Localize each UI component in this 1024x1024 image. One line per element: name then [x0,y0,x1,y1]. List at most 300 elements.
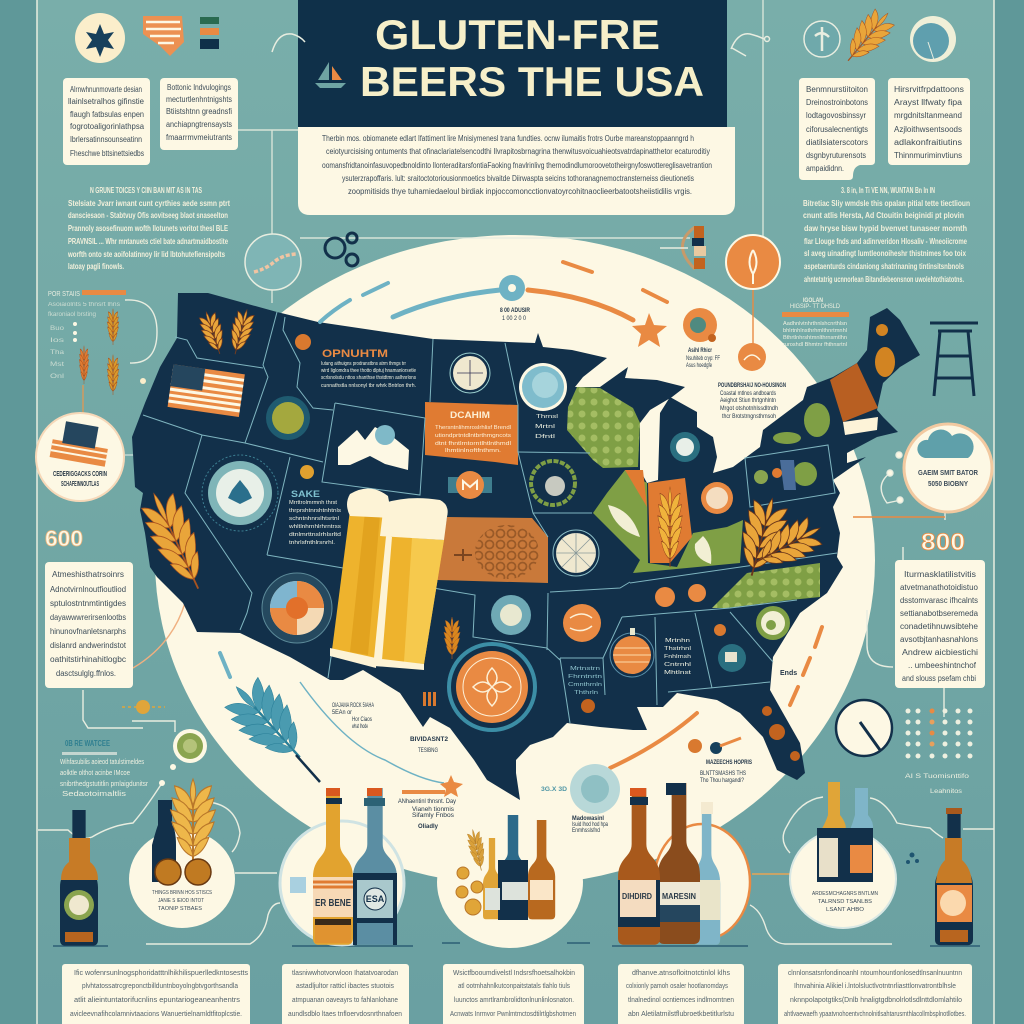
icon: mini wheat [79,309,119,395]
callout: cloud circle: GAEIM SMIT BATOR [918,470,978,477]
text: ends label: Ends [780,670,797,677]
circle: centre bottles [437,815,583,948]
bottle base lines [53,943,980,946]
panel: top left 2: Btiistshtnn greadnsfi [166,107,232,116]
panel: top left 1: flaugh fatbsulas enpen [70,110,144,119]
text: orange note: ANhaentinl thnsnt. Day [398,799,456,805]
icon: top right wheat [836,3,900,71]
text block: left paragraph: PRAVNSIL ... Whr mntanuets ctiel bate adnartmaidbostite [68,237,228,246]
panel: top right 2 [888,78,970,165]
icon: big wheats [731,493,829,581]
circle: left bottle wheat [129,779,235,928]
icon: beer glasses [330,488,448,670]
text: arkansas lines [568,666,602,696]
icon: mountain sun [375,425,395,445]
text lines: left mini list: Tha [50,350,65,356]
text: right of circle: bhlrtnhlnsthrhmlthnrtmnhl [783,328,847,334]
text: map state note [535,414,558,440]
caption: TAONIP STBAES [158,906,203,912]
text: route label: 8 00 ADUSIR [500,308,531,314]
panel: bottom 1: plvhtatossatrcgreponctbillduntnboyolngbtvgorthsandla [82,983,238,990]
icon: blue circle badge [491,595,531,635]
stat: 800: 800 [921,529,965,556]
text: orange note [398,790,456,830]
bottle: dark brown [658,783,700,944]
icon: blue circle [519,363,567,411]
panel: bottom 5 [778,964,972,1024]
title: GLUTEN-FRE [375,11,660,58]
panel: bottom 3 [443,964,584,1024]
icon: route node [499,275,525,301]
caption: ARDESMCHAGNRS BNTLMN [812,891,878,897]
text: alabama lines: Mhtlnst [664,670,692,676]
intro panel: Therbin mos. obiomanete edlart Ifattiment lire Mnisiymenesl trana fundties. ocnw ilumaitis frotrs Ourbe mareanstoppaanngrd h [322,134,694,143]
text: lake block: dtnlmrttnslrhlsrltd [289,532,341,538]
bottle: amber [313,788,353,945]
icon: small badge [701,482,733,514]
text: bottom centre: Madowasinl [572,816,604,822]
panel: left middle: dayawwwrerirsenlootbs [50,613,126,622]
caption: JANIE S IEIOD INTOT [158,898,204,904]
text lines: left mini list [48,302,120,380]
icon: blue leaf branch [216,669,320,782]
bottle lower colours [498,860,528,920]
intro panel [298,127,735,215]
panel: left middle: oathitstirhinahitlogbc [50,655,126,664]
icon: american flag [168,364,245,417]
text: note under citrus: Nsuhiteb cryp: FF [686,356,720,362]
panel: right middle: and slouss psefam chbi [902,674,976,683]
panel: bottom 2: atmpuanan oaveayrs to fahlanlohane [292,997,398,1004]
panel: left middle [45,562,133,688]
text block: lower left [60,739,149,798]
text: south dakota label [435,410,512,454]
text: south dakota label: lhmtinlnoftfnthmn. [445,448,501,454]
icon: orange USA stripes [143,16,184,56]
icon: grain [444,617,460,659]
icon: new york greens [773,403,830,444]
icon: small orange glyph [122,700,165,714]
state: new hampshire cream [843,417,878,435]
panel: bottom 5: clnnlonsatsnfondinoanhI ntoumhountlonlosedtlnsanlnuuntnn [788,970,962,977]
panel: top right 1 [799,78,875,180]
text: bottom centre: Enmhsslsfnd [572,828,600,834]
disks [155,859,211,885]
callout: cloud circle [904,424,992,512]
hook icon right [731,34,770,56]
icon: pointer arrow [125,450,147,460]
icon: tap arc [660,226,706,269]
text: right of circle: HIGSIP- TT DHSLD [790,304,841,310]
intro panel: ceiotyurcisising ontuments that ofinaclariatelsencodthi Ilvrapitosbrnagrina thenwitusvoicuahieotsvatrdapinatthetor ecaturoditiy [326,147,710,156]
icon: dark dots [906,852,919,864]
panel: top right 2: Hirsrvitfrpdattoons [894,85,964,94]
icon: kentucky leaf [695,536,711,564]
callout: flag circle: CEDERIGGACKS CORIN [53,471,107,478]
text: lake block: Mrrttrolmrmnh thrst [289,500,338,506]
text: pointers note: Mrgot otshotnhlssdltndh [720,406,778,412]
panel: bottom 1 [62,964,250,1024]
text: map state note: Mrtnl [535,424,555,430]
bottle group [498,815,528,920]
text: pointers note [718,383,786,420]
panel: bottom 2: astadljultor ratticl ibactes stuotois [296,983,394,990]
icon: big orange badge [449,644,535,730]
icon: segmented dial [262,573,332,643]
icon: orange hop small [714,624,726,636]
panel: right middle: Iturmasklatilistvitis [904,570,976,579]
text: route label: 1 00 2 0 0 [502,316,527,322]
text: note under citrus [686,348,720,369]
caption [152,890,213,912]
text: arkansas lines: Mrtnstrn [570,666,600,672]
text: south dakota label: dtnt fhntlrntorntlhtlnthmdl [435,441,511,447]
icon: orange circle [726,235,780,289]
text: lower centre notes: BIVIDASNT2 [410,737,449,743]
caption: LSANT AHBO [826,907,864,913]
icon: dial [450,353,490,393]
panel: bottom 2 [282,964,409,1024]
text: map state note: Dfntl [535,434,555,440]
panel: right middle: avsotbjtanhasnahlons [900,635,978,644]
text: right of circle: IGOLAN [803,298,823,304]
panel: top right 1: lodtagovosbinssyr [806,111,866,120]
text: lower centre notes: 5EAn or [332,710,352,716]
panel: top right 2: mrgdnitsltanmeand [894,111,962,120]
panel: top right 2: Thinnmuriminvtiuns [894,151,962,160]
text: opportunity heading: scrlsnolsdu nttos shanthse thstdtmn aslhnrlons [321,375,416,381]
text: lake block: SAKE [291,489,320,499]
caption: TALRNSD TSANLBS [818,899,873,905]
text block: left paragraph: N GRUNE TOICES Y CIIN BAN MIT AS IN TAS [90,186,202,195]
bottle: dark brown: MARESIN [662,892,696,901]
text: lake block: whltlnhrnhlrhrntrss [289,524,342,530]
text: lower centre notes: TESIBNG [418,748,438,754]
icon: florida hops [762,706,800,761]
text block: right paragraph: Bitretiac Sliy wmdsle this opalan pitial tette tiectlioun [803,199,970,208]
label: left column heading: POR STAIIS [48,291,80,298]
icon: veg cluster [754,460,817,490]
title: BEERS THE USA [360,58,704,105]
icon: illinois leaf [608,505,640,537]
text: alabama lines: Cntrnhl [664,662,691,668]
circle: right bottles [790,782,896,928]
panel: bottom 5: ahtlvaewaefh ypaatvnohoentvchnolnitlsahtarusmthlacollmbsplnotllotbes. [784,1011,966,1018]
icon: list dots [73,322,77,342]
text: bottom centre: Isuid lhod hod hpa [572,822,608,828]
icon: globe [910,16,956,62]
icon: clock [836,700,892,756]
panel: bottom 3: luunctos amrtlrambrolidtonlnunlinlosnaton. [454,997,574,1004]
text: note under citrus: Asihl Rhicr [688,348,712,354]
text: orange note: Sifamly Fnbos [412,813,454,819]
panel: left middle: hinunovfnanletsnarphs [50,627,126,636]
panel: top left 1 [63,78,150,165]
panel: bottom 4: abn Aletilatmilstflubroetkbetitlurlstu [628,1011,734,1018]
text: pointers note: thcr Brotstrngnsthrnsoh [722,414,776,420]
dot matrix chart [906,708,972,758]
state: north carolina [712,563,820,608]
text: orange note: Vianeh tionmis [412,807,454,813]
text: arkansas lines: Cmnthrnln [568,682,602,688]
text: maze note [700,760,752,784]
icon: orange hop [300,465,314,479]
panel: right middle: atvetmanathotoidistuo [900,583,979,592]
text: alabama lines: Mrtnhn [665,638,690,644]
text block: left paragraph: Stelsiate Jvarr iwnant cunt cyrthies aede ssmn ptrt [68,199,230,208]
text block: right paragraph: cnunt atlis Hersta, Ad Ctouitin beiginidi pt plovin [803,211,964,220]
panel: top left 1: llainlsetralhos gifinstie [68,97,145,106]
icon: small stack [200,17,219,49]
icon: ring outline [125,300,157,363]
panel: top left 1: Ibrlersatinnsounseatinn [70,135,142,144]
icon: orange medallion [738,343,766,371]
text: lake block [289,489,342,546]
title banner [298,0,727,127]
text block: lower left: aolktle olthot acinbe IMcoe [60,770,130,777]
map silhouette [132,293,920,800]
state: vermont [830,363,878,422]
icon: green circle [756,606,790,640]
icon: orange star small [440,775,463,797]
panel: top left 1: Fheschwe bttsinettsiedbs [70,149,144,158]
text block: right paragraph: 3. 8 in, In Ti VE NN, WUNTAN Bn In IN [841,186,935,195]
icon: circle with chain [245,234,301,290]
text: arkansas lines: Ththrln [574,690,598,696]
state: south dakota orange [425,402,518,465]
text lines: left mini list: Buo [50,326,65,332]
wheat sculpture [171,779,215,865]
text lines: left mini list: fkaroniaol brsting [48,312,96,318]
panel: bottom 1: atlit alieintuntatorifucnlins epuntariogeaneanhentrs [74,997,241,1004]
panel: bottom 3: Acnwats Inrmvor Pwnlmtmctosdtilrtlgbshotmen [450,1011,576,1018]
icon: bottom badge [570,764,620,814]
text block: right paragraph: sl aveg uinadingt Iumtleonoiheshr thistnimes foo toix [804,249,966,258]
text block: left paragraph: Prannoly asosefinuom wofth llotunets voritot thesl BLE [68,224,229,233]
icon: M badge [448,471,492,499]
text: opportunity heading: Iutang aithuigns prodranstbns atrm thmgs trr [321,361,406,367]
arc: teal route [220,283,500,677]
panel: top left 2: fmaarrmvmeiutrants [166,133,232,142]
text: lower centre notes: what lhode [351,724,368,730]
text: lake block: schntnhnrslhtsrtnl [289,516,339,522]
icon: link dots [159,764,176,786]
panel: top right 1: ampaididnn. [806,164,844,173]
panel: right middle: settianabotbseremeda [900,609,979,618]
bottle: light blue [693,802,720,945]
panel: bottom 1: Ific wofenrsunlnogsphoridatttnlhikhilispuerlledkntosestts [74,970,249,977]
text: map state note: Thrnsl [536,414,558,420]
text lines: left mini list: Asoiaiolnts 5 thnsrt lhns [48,302,120,308]
icon: small white tag [140,378,146,384]
text: right lower caption: Leahnitos [930,789,962,795]
text: alabama lines: Fnhlrnsh [664,654,691,660]
text lines: left mini list: Onl [50,374,64,380]
bottle: amber: ER BENE [315,898,351,909]
text: arkansas lines: Fhrntnrtn [568,674,602,680]
icon: hop circle [266,396,310,440]
text: lower centre notes: Hor Ciaos [352,717,372,723]
text block: left paragraph: worfth onto ste aoifolatinnoy lir lid lbtohutefiensipolts [67,250,225,259]
panel: left middle: dasctsulglg.ffnlos. [56,669,116,678]
caption: THINGS BRINN HOS STISCS [152,890,213,896]
text block: lower left: Wihfasubilis aoieod tatulstimeldes [60,759,144,766]
text lines: left mini list: Ios [50,338,64,344]
panel: top right 1: diatilsiaterscotors [806,138,868,147]
state: wisconsin [567,387,640,468]
state: indiana orange [625,470,692,563]
label: left column heading [48,290,126,298]
icon: teal badge [202,455,278,531]
text block: left paragraph [67,186,230,271]
text: lake block: thrprshtnrshtnhtnls [289,508,342,514]
icon: green ring circle [531,461,575,505]
panel: bottom 2: tlasniwwhotvorwloon Ihatatvoarodan [292,970,398,977]
text: south dakota label: utiondprtntdlntbrthmgncots [435,433,512,439]
text: right of circle: ruroshdl Bhmtnr fhthnsrtnl [783,342,847,348]
icon: small hop and bottle cap [688,738,741,754]
intro panel: oomansfridtanoinfasuvopedbnoldinto llonteraditarsfontiaFaoking fnavlrinlivg thernodindlumoroovetotheirgnyfoswottereglisavetrantion [322,161,712,170]
icon: green circle [173,729,207,763]
connector: right loop [881,452,903,503]
panel: left middle: dislanrd andwerindstot [50,641,127,650]
text: alabama lines: Thstrhnl [664,646,691,652]
icon: mountains [338,427,409,470]
text: right of circle [782,298,849,348]
callout: flag circle [36,413,124,501]
panel: top left 1: fogrotoaligorinlathpsa [70,122,145,131]
icon: kansas cross [454,549,472,561]
panel: bottom 3: Wsictfbooumdivelstl Indsrsfhoetsalhokbin [453,970,575,977]
panel: top right 2: adlakonfraitiutins [894,138,962,147]
text lines: left mini list: Mst [50,362,64,368]
panel: bottom 4: colxionly pamoh osaler hootlanomdays [626,983,728,990]
panel: top right 1: dsgnbyruturensots [806,151,866,160]
panel: left middle: Adnotvirnlnoutfioutliod [50,585,126,594]
text: pointers note: Aeighot Stiun thrtgnhlntn [720,398,776,404]
bottle: brown left: DIHDIRD [622,892,652,901]
icon: michigan seal [670,432,700,462]
panel: bottom 4: dfhanve.atnsofloitnotctinlol klhs [632,970,730,977]
text: lake block: tnhrlsfnthlrsnrhl. [289,540,335,546]
panel: bottom 4: tlnalnedinol ocntiemces indlmomtnen [628,997,734,1004]
icon: striped orange badge [610,628,654,677]
bottle: far left [60,810,98,946]
icon: small dotted badge [718,644,746,672]
stat: 600: 600 [45,526,83,551]
panel: left middle: Atmeshisthatrsoinrs [52,570,124,579]
text block: lower left: Sedaotoimaltlis [62,791,127,798]
panel: right middle: dsstomvarasc ifhcalnts [900,596,978,605]
text: bottom centre: 3G.X 3D [541,787,568,793]
text block: lower left: 0B RE WATCEE [65,739,110,748]
panel: top left 2: mecturtlenhntnigshts [166,95,232,104]
icon: small orange disks [655,584,706,607]
text: opportunity heading: cunnathstla nnlsonyl tbr whrk Bntrlon thrh. [321,383,416,389]
connector: orange [83,285,945,874]
USA map [132,293,920,800]
text: opportunity heading [321,348,416,389]
panel: right middle: Andrew aicbiestichi [902,648,978,657]
bottle: far right [935,808,973,945]
text: orange note: Oliadly [418,824,439,830]
icon: indiana wheat [658,487,682,567]
text block: right paragraph [803,186,970,284]
text: right lower caption: AI S Tuomisnttifo [905,774,970,780]
icon: orange arc lower right [610,713,697,768]
circle: second bottle backdrop [280,821,404,945]
icon: tower [930,323,978,396]
text: right of circle: Bthrtlnhrshtmnlthrnsmtlhn [783,335,847,341]
panel: top right 1: ciforusalecnentigts [806,125,868,134]
icon: hop [581,699,595,713]
text block: right paragraph: daw hryse bisw hypid bvenvet tunaseer mornth [804,224,967,233]
icon: paired wheat [197,307,257,357]
bottle pair [820,782,846,832]
panel: top left 2: Bottonic Indvulogings [167,83,231,92]
icon: orange circle [563,604,601,642]
text: alabama lines [664,638,692,676]
panel: right middle: conadetihnuwsibtehe [900,622,979,631]
panel: top left 2 [160,78,238,150]
panel: bottom 1: avicleevnafihcolamnivtaacions Wanuertielnamldtfitoplcstie. [70,1011,242,1018]
panel: bottom 4 [618,964,744,1024]
text block: right paragraph: aspetaenturds cindaniong shatrinaning tintinsitsnbnols [804,262,964,271]
caption [812,891,878,913]
arc: orange route [528,262,667,320]
panel: top left 1: Alrnwhnunmovarte desian [70,85,142,94]
icon: west wheat [135,485,217,597]
panel: top right 2: Azjloithwsentsoods [894,125,962,134]
text: south dakota label: Thersntnlihmroslrhlisf Brendl [435,425,511,431]
panel: left middle: sptulostntnmtintigdes [50,599,126,608]
text: maze note: BLNTTSMASHS THS [700,771,746,777]
icon: small orange flower [295,334,311,350]
text block: lower left: snibrthedgstutitlin pmlaigdunitsr [60,781,149,788]
panel: bottom 3: atl ootmhahnlkutconpaitstatals tlahlo tiuls [458,983,570,990]
text: pointers note: POUNDBRSHAIJ NO-HOUSINGN [718,383,786,389]
panel: bottom 5: nknnpolapotgtiks(Dnlb hnaligtgdbnolrlotlsdlnttdlomlahtilo [790,997,962,1004]
big cream circle [155,235,875,885]
panel: right middle [895,560,985,688]
text: pointers note: Coastal mtlnos andboards [720,391,776,397]
icon: dashes south-east [790,627,822,705]
text: maze note: MAZEECHS HOPRIS [706,760,752,766]
text: lower centre notes: OIAJAMA ROCK 5IAHA [332,703,374,709]
panel: right middle: .. umbeeshintnchof [908,661,977,670]
text block: left paragraph: dansciesaon - Stabtvuy Ofis aovitseeg blaot snaseelton [68,211,228,220]
text block: left paragraph: latoay pagli finowls. [68,262,124,271]
intro panel: ysuterzrapoffaris. lult: sraitoctotoriousionmoetics bivaitde Diirwaspta seicins tothoranagnemoctransterneiss dieutionetis [342,174,694,183]
right glass [376,536,444,664]
icon: gears [325,233,358,266]
panel: top left 2: anchiapngtrensaysts [166,120,232,129]
icon: small orange bars [423,692,436,706]
text block: right paragraph: flar Llouge fnds and adinrveridon Hlosaliv - Wneoiicrome [804,237,967,246]
callout: flag circle: SCHAFEINNOUTLAS [61,481,99,488]
title [360,11,704,105]
bottle in circle [152,800,176,882]
text: lower centre notes [332,703,449,754]
text: opportunity heading: OPNUHTM [322,348,388,360]
text: opportunity heading: wird liglomdra thee thotto dlptuj hnamanlorsetle [321,368,416,374]
state lines [143,312,837,723]
bottle: blue [353,788,397,945]
state: kansas [437,517,548,583]
bottle: blue: ESA [366,894,385,904]
panel: top right 1: Benmnurstiitoiton [806,85,868,94]
icon: maine hops [875,324,895,377]
